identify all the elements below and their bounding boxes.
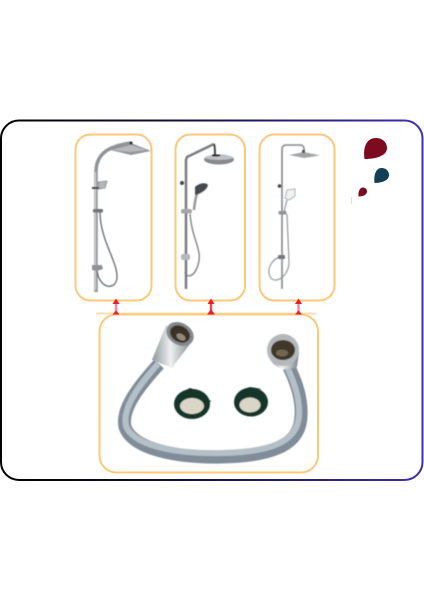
- arrow: right: [295, 298, 302, 314]
- icon: small red drop: [358, 188, 367, 196]
- shower 3 drawing: [269, 145, 320, 289]
- left hose fitting: [152, 317, 198, 368]
- filter washer right: [234, 387, 268, 416]
- shower 2 drawing: [180, 144, 234, 289]
- icon: large red drop: [364, 138, 387, 159]
- outer rounded frame: [1, 120, 422, 480]
- right hose fitting: [267, 334, 299, 369]
- flexible hose: [124, 364, 301, 457]
- panel: hose and filter washers: [100, 314, 318, 472]
- arrow: middle: [207, 298, 215, 314]
- faint tick mark: [350, 197, 352, 204]
- panel: shower set 2: [176, 134, 245, 300]
- connector line: [96, 312, 316, 314]
- filter washer left: [174, 388, 211, 419]
- icon: teal drop: [374, 168, 389, 183]
- panel: shower set 3: [260, 134, 334, 300]
- arrow: left: [112, 298, 120, 314]
- shower 1 drawing: [92, 142, 151, 292]
- panel: shower set 1: [76, 134, 152, 300]
